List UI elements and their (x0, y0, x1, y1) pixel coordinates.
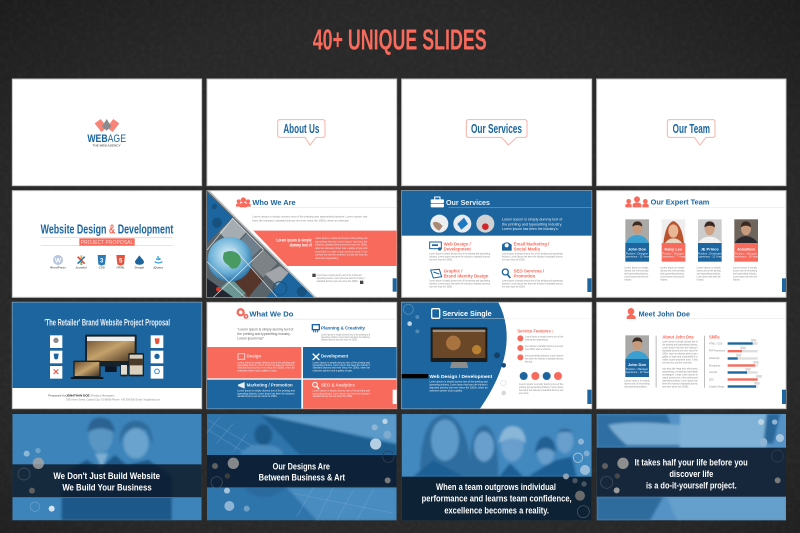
card: je prince: dummy text of the printing (697, 268, 721, 272)
features list: since 1500s, when an unknown. (525, 347, 551, 351)
intro text: been the industry's standard dummy text ever since the 1500s, when an unknown (252, 219, 350, 223)
icon: tablet (432, 309, 440, 318)
card: je prince: Position : Developer (698, 252, 722, 256)
about text: been the industry's standard dummy (662, 382, 698, 386)
card: kany lee: Position : Designer (662, 252, 685, 256)
quad: design (207, 347, 301, 378)
card: jonathon: Jonathon (737, 247, 756, 252)
slide: who we are: scrambled it to make a type specimen book. It has (315, 249, 368, 253)
header text: Lorem Ipsum has been the industry's. (502, 227, 559, 231)
features list: and typesetting industry. Lorem Ipsum (525, 353, 564, 357)
card: je prince: JE Prince (701, 247, 720, 252)
header text: Lorem Ipsum is simply dummy text of (502, 218, 562, 222)
coral band text: dummy text of (290, 242, 312, 247)
profile card: Position : Manager (626, 367, 648, 371)
skills chart: Wordpress (709, 363, 721, 367)
decorative bubbles (403, 304, 506, 395)
technology tiles (50, 335, 163, 379)
skills heading: Skills (709, 334, 720, 339)
blue curved panel (402, 302, 507, 409)
about text: standard dummy text ever since the (662, 349, 698, 353)
service text: unknown printer took a galley. (429, 389, 463, 393)
slide: our expert team (597, 191, 786, 297)
page tab (587, 278, 592, 292)
card: john doe: Experience : 10 Years (624, 255, 651, 259)
card: john doe: industry. (624, 277, 632, 281)
quad: seo: typesetting industry. Lorem Ipsum has been the industry's (313, 391, 371, 395)
card: john doe: dummy text of the printing (624, 268, 649, 272)
card: john doe: and typesetting industry. (624, 271, 649, 275)
about text: survived not only five centuries. (662, 361, 693, 365)
service: graphic: Lorem Ipsum is simply dummy text of the printing and typesetting (429, 279, 490, 283)
quad: seo (303, 380, 397, 409)
title: 40+ UNIQUE SLIDES (313, 24, 487, 56)
service: email marketing: Lorem Ipsum is simply dummy text of the printing and typesetting (502, 252, 563, 256)
slide: retailer proposal (12, 302, 202, 409)
slide: logo (12, 79, 202, 186)
card: john doe: Position : Designer (626, 252, 648, 256)
slide: website design and development: jQuery (153, 266, 163, 270)
slide: business and art (207, 414, 397, 520)
quad: seo: SEO & Analytics (321, 383, 355, 388)
heading: What We Do (249, 309, 294, 318)
skills chart: Graphic Design (709, 384, 725, 388)
card: jonathon: Position : Manager (735, 252, 757, 256)
about text: Lorem Ipsum has been the industry's (662, 346, 698, 350)
slide: website design and development (12, 191, 202, 297)
quote text: When a team outgrows individual (436, 482, 556, 492)
quote text (237, 328, 293, 340)
features heading: Service Features : (517, 329, 554, 334)
bubbles (18, 448, 55, 512)
slide: website design and development: Joomla! (75, 266, 87, 270)
service: seo: Lorem Ipsum is simply dummy text of the printing and typesetting (502, 279, 563, 283)
slide: service single (402, 302, 592, 409)
service: graphic (429, 269, 491, 289)
monitor (431, 327, 487, 368)
coral band text (276, 237, 312, 247)
slide: website design and development: 3 (100, 259, 104, 265)
team icon (625, 196, 649, 207)
slide: half your life (597, 414, 786, 520)
quad: development: Lorem Ipsum is simply dummy text of the printing and (313, 360, 370, 364)
card: jonathon (733, 219, 760, 281)
card: kany lee: Lorem Ipsum is simply (660, 265, 685, 269)
card: kany lee (660, 219, 686, 281)
quote: standard dummy text ever since the 1500s, (317, 279, 359, 283)
dark text band (12, 464, 202, 497)
skills chart: PHP Framework (709, 349, 726, 353)
features paragraph: ever since. (519, 391, 529, 395)
profile caption (624, 378, 650, 388)
service: graphic: Graphic / (444, 269, 463, 274)
coral band text: Lorem Ipsum is simply (276, 237, 312, 242)
service: email marketing: Social Media (514, 247, 540, 252)
quad: development: unknown printer took a galley of type. (313, 368, 353, 372)
planning block: typesetting industry. Lorem Ipsum has been the industry's (321, 335, 370, 339)
profile card: John Doe (628, 362, 647, 367)
card: je prince: and typesetting industry. (697, 271, 721, 275)
duotone photo of team (413, 414, 577, 477)
features paragraph: Lorem Ipsum is simply dummy text of the (519, 382, 564, 386)
quote text: It takes half your life before you (635, 458, 748, 468)
slide: what we do (207, 302, 397, 409)
heading: Our Services (446, 198, 490, 207)
service text: Lorem Ipsum is simply dummy text of the printing and (429, 380, 488, 384)
quad: development: typesetting industry. Lorem Ipsum has been the industry's (313, 363, 371, 367)
slide: meet john doe (597, 302, 786, 409)
planning block: Planning & Creativity (321, 326, 366, 331)
page tab (782, 390, 786, 404)
features list: printing and typesetting. (525, 338, 549, 342)
about text: Lorem Ipsum is simply dummy text of (662, 340, 698, 344)
footer text (48, 394, 161, 401)
quad: development: standard dummy text ever since the 1500s, when an (313, 366, 370, 370)
features list (517, 335, 564, 363)
gears icon (238, 309, 248, 318)
quote text: "Lorem Ipsum is simply dummy text of (237, 328, 293, 332)
slide: website design and development: WordPress (50, 266, 66, 270)
quote text (422, 482, 572, 515)
person icon (627, 308, 636, 319)
heading: Service Single (442, 309, 492, 318)
features list: the industry's standard dummy text ever (525, 344, 563, 348)
slide: about us: About Us (283, 122, 319, 136)
service: email marketing (502, 242, 563, 262)
card: jonathon: and typesetting industry. (733, 271, 757, 275)
profile caption: dummy text of the printing (624, 381, 650, 385)
slide: who we are (207, 191, 397, 297)
slide: website design and development: Drupal (135, 266, 144, 270)
service: email marketing: text ever since the 1500s. (502, 258, 526, 262)
service: seo (502, 269, 563, 289)
coral band (253, 231, 397, 266)
quad: marketing (207, 380, 301, 409)
bubbles (601, 419, 784, 493)
slide: website design and development: PROJECT PROPOSAL (81, 240, 133, 246)
planning block: standard dummy text ever since the 1500s. (321, 338, 358, 342)
card: john doe: John Doe (628, 247, 647, 252)
about text: typesetting industry. Lorem Ipsum has (662, 379, 698, 383)
card: jonathon: Lorem Ipsum has been the (733, 274, 757, 278)
quote: Lorem Ipsum is simply dummy text of the printing and (317, 273, 362, 277)
quote text: excellence becomes a reality. (444, 505, 549, 515)
slide: our team divider: Our Team (673, 122, 710, 136)
quote: typesetting industry. Lorem Ipsum has been the industry's (317, 276, 365, 280)
service: email marketing: industry. Lorem Ipsum has been the industry's standard dummy (502, 255, 563, 259)
slide: our services divider (402, 79, 592, 186)
service: web design: Lorem Ipsum is simply dummy text of the printing and typesetting (429, 252, 490, 256)
heading: Who We Are (252, 198, 296, 207)
card: je prince: Experience : 12 Years (697, 255, 723, 259)
service title: Web Design / Development (429, 374, 493, 379)
quad: design: unknown printer took a galley of type. (237, 368, 278, 372)
card: kany lee: Lorem Ipsum has been the (660, 274, 685, 278)
black label bar (402, 374, 428, 378)
slide: team outgrows (402, 414, 592, 521)
service: graphic: Brand Identity Design (444, 274, 489, 279)
quote text (53, 472, 160, 490)
slide: who we are: when an unknown printer took a galley of type and (315, 246, 368, 250)
features paragraph (519, 382, 564, 395)
quad: marketing: Lorem Ipsum is simply dummy text of the printing and (237, 389, 295, 393)
planning block (312, 325, 370, 342)
page tab (393, 390, 397, 404)
service: web design: Web Design / (444, 242, 472, 247)
quad: seo: Lorem Ipsum is simply dummy text of the printing and (313, 389, 370, 393)
card: je prince: industry. (697, 277, 704, 281)
page tab (393, 278, 397, 292)
features paragraph: has been the industry's standard dummy text (519, 388, 564, 392)
briefcase icon (431, 197, 444, 207)
service: seo: Promotion (514, 274, 536, 279)
service: web design: Development (444, 247, 471, 252)
slide: logo: THE WEB AGENCY (93, 143, 121, 147)
service text (429, 380, 488, 393)
quote text: the printing and typesetting industry. (237, 332, 291, 336)
slide: our team divider (597, 79, 786, 186)
features paragraph: printing and typesetting industry. Lorem Ipsum (519, 385, 564, 389)
service text: typesetting industry. Lorem Ipsum has been the industry's (429, 383, 488, 387)
about text: the printing and typesetting industry. (662, 343, 698, 347)
slide: who we are: electronic typesetting. (315, 256, 339, 260)
page tab (782, 278, 786, 292)
quote text (635, 458, 748, 490)
card: jonathon: Experience : 18 Years (733, 255, 760, 259)
quote text: Between Business & Art (259, 473, 345, 483)
about text (662, 340, 698, 389)
features list: text. (525, 359, 534, 363)
service: seo: SEO Services / (514, 269, 545, 274)
quote text: is a do-it-yourself project. (646, 480, 737, 490)
duotone photo of two people (62, 417, 172, 520)
card: kany lee: dummy text of the printing (660, 268, 685, 272)
slide: logo: WEBAGE (87, 133, 126, 145)
people icon (236, 197, 251, 207)
quad: design: Design (247, 354, 261, 359)
profile card (624, 335, 651, 377)
slide: website design and development: 5 (119, 259, 123, 265)
about text: galley of type and scrambled it to (662, 355, 698, 359)
bubbles (563, 439, 590, 518)
quad: seo: standard dummy text ever since the 1500s. (313, 394, 353, 398)
service: web design: industry. Lorem Ipsum has been the industry's standard dummy (429, 255, 491, 259)
card: kany lee: industry. (660, 277, 668, 281)
slide: who we are: typesetting industry. Lorem Ipsum has been the (315, 239, 368, 243)
card: jonathon: dummy text of the printing (733, 268, 757, 272)
card: kany lee: and typesetting industry. (660, 271, 685, 275)
dark text band (402, 477, 592, 521)
card: je prince: Lorem Ipsum has been the (697, 274, 721, 278)
about text: 1500s, when an unknown printer took a (662, 352, 698, 356)
quote text: We Don't Just Build Website (53, 471, 160, 481)
bubbles (211, 419, 394, 512)
footer text: JONATHAN DOE (Project Manager) (66, 394, 114, 398)
slide: who we are: industry's standard dummy text ever since the 1500s, (315, 243, 368, 247)
card: je prince: Lorem Ipsum is simply (697, 265, 721, 269)
quad: marketing: Marketing / Promotion (247, 383, 293, 388)
card: je prince (697, 219, 723, 281)
slide: about us (207, 79, 397, 186)
slide: we build your business (12, 414, 202, 520)
quote text: discover life (669, 469, 713, 479)
about text: simply dummy text of the printing and (662, 376, 698, 380)
header text: the printing and typesetting industry. (502, 222, 562, 226)
round icons (519, 372, 562, 380)
heading: Our Expert Team (651, 197, 710, 206)
dark text band (207, 455, 397, 487)
blue header (402, 191, 592, 236)
quad: development (303, 347, 397, 378)
service: graphic: industry. Lorem Ipsum has been the industry's standard dummy (429, 282, 491, 286)
slide: who we are: Lorem Ipsum is simply dummy text of the printing and (315, 236, 368, 240)
quad: marketing: standard dummy text ever since the 1500s. (237, 394, 278, 398)
card: john doe: Lorem Ipsum has been the (624, 274, 649, 278)
card: john doe (624, 219, 651, 281)
quote text: We Build Your Business (62, 483, 152, 493)
footer text: 1900 Aves Street, Capital City, NJ 98568 Phone: +90 599 856 Email: info@mail.com (66, 397, 161, 401)
skills chart: Joomla (709, 370, 717, 374)
service: web design (429, 242, 491, 262)
quote text: Lorem Ipsum has" (237, 336, 265, 340)
profile caption: and typesetting industry. (624, 384, 647, 388)
card: kany lee: Experience : 7 Years (661, 255, 686, 259)
quad: design: Lorem Ipsum is simply dummy text of the printing and (237, 360, 295, 364)
features list: has been the industry's standard dummy (525, 356, 564, 360)
service: seo: text ever since the 1500s. (502, 285, 526, 289)
skills chart (709, 339, 762, 388)
dark text band (597, 448, 786, 497)
card: kany lee: Kany Lee (664, 247, 683, 252)
quad: development: Development (321, 354, 349, 359)
about text: unchanged. It was Lorem Ipsum is (662, 373, 698, 377)
heading: Meet John Doe (639, 309, 690, 318)
skills chart: Javascript (709, 356, 720, 360)
skills chart: HTML / CSS (709, 341, 723, 345)
photo circles (430, 215, 494, 233)
slide: our services divider: Our Services (471, 122, 522, 136)
card: jonathon: Lorem Ipsum is simply (733, 265, 758, 269)
quote (312, 273, 365, 284)
card: john doe: Lorem Ipsum is simply (624, 265, 649, 269)
card: jonathon: industry. (733, 277, 741, 281)
profile card: Experience : 10 Years (624, 370, 651, 374)
slide: website design and development: W (55, 257, 62, 264)
skills chart: SEO (709, 377, 714, 381)
about text: but also the leap into electronic (662, 367, 698, 371)
quote text: Our Designs Are (273, 461, 330, 471)
about text: make a type specimen book. It has (662, 358, 698, 362)
planning block: Lorem Ipsum is simply dummy text of the printing and (321, 332, 370, 336)
quad: marketing: typesetting industry. Lorem Ipsum has been the industry's (237, 391, 295, 395)
quote text (259, 463, 345, 480)
quote text: performance and learns team confidence, (422, 494, 572, 504)
service: seo: industry. Lorem Ipsum has been the industry's standard dummy (502, 282, 563, 286)
header text (502, 218, 562, 231)
service text: standard dummy text ever since the 1500s, when an (429, 386, 488, 390)
blue cover panel (12, 302, 202, 388)
slide: website design and development: CSS (99, 266, 105, 270)
slide: website design and development: Website Design & Development (41, 222, 174, 237)
about text: typesetting, remaining essentially (662, 370, 698, 374)
features list: Lorem Ipsum is simply dummy text of the (525, 335, 564, 339)
mosaic image panel (207, 191, 317, 297)
intro text: Lorem Ipsum is simply dummy text of the printing and typesetting industry. Lorem Ipsum has (252, 215, 368, 219)
slide: our services (402, 191, 592, 297)
duotone photo of keyboard and person (240, 414, 397, 520)
about heading: About John Doe (662, 334, 694, 339)
quad: design: standard dummy text ever since the 1500s, when an (237, 366, 295, 370)
slide: who we are: survived not only five centuries, but also the leap into (315, 253, 368, 257)
cover title: 'The Retailer' Brand Website Project Proposal (44, 317, 170, 327)
quad: design: typesetting industry. Lorem Ipsum has been the industry's (237, 363, 295, 367)
service: web design: text ever since the 1500s. (429, 258, 453, 262)
responsive devices (71, 335, 144, 379)
profile caption: Lorem Ipsum is simply (624, 378, 650, 382)
intro text (252, 215, 368, 223)
service: graphic: text ever since the 1500s. (429, 285, 453, 289)
slide: website design and development: HTML (117, 266, 125, 270)
footer text: Prepared for : (48, 394, 68, 398)
service: email marketing: Email Marketing / (514, 242, 550, 247)
about text: text ever since the 1500s. (662, 385, 689, 389)
page tab (587, 390, 592, 404)
duotone photo of hand on laptop (597, 414, 786, 520)
